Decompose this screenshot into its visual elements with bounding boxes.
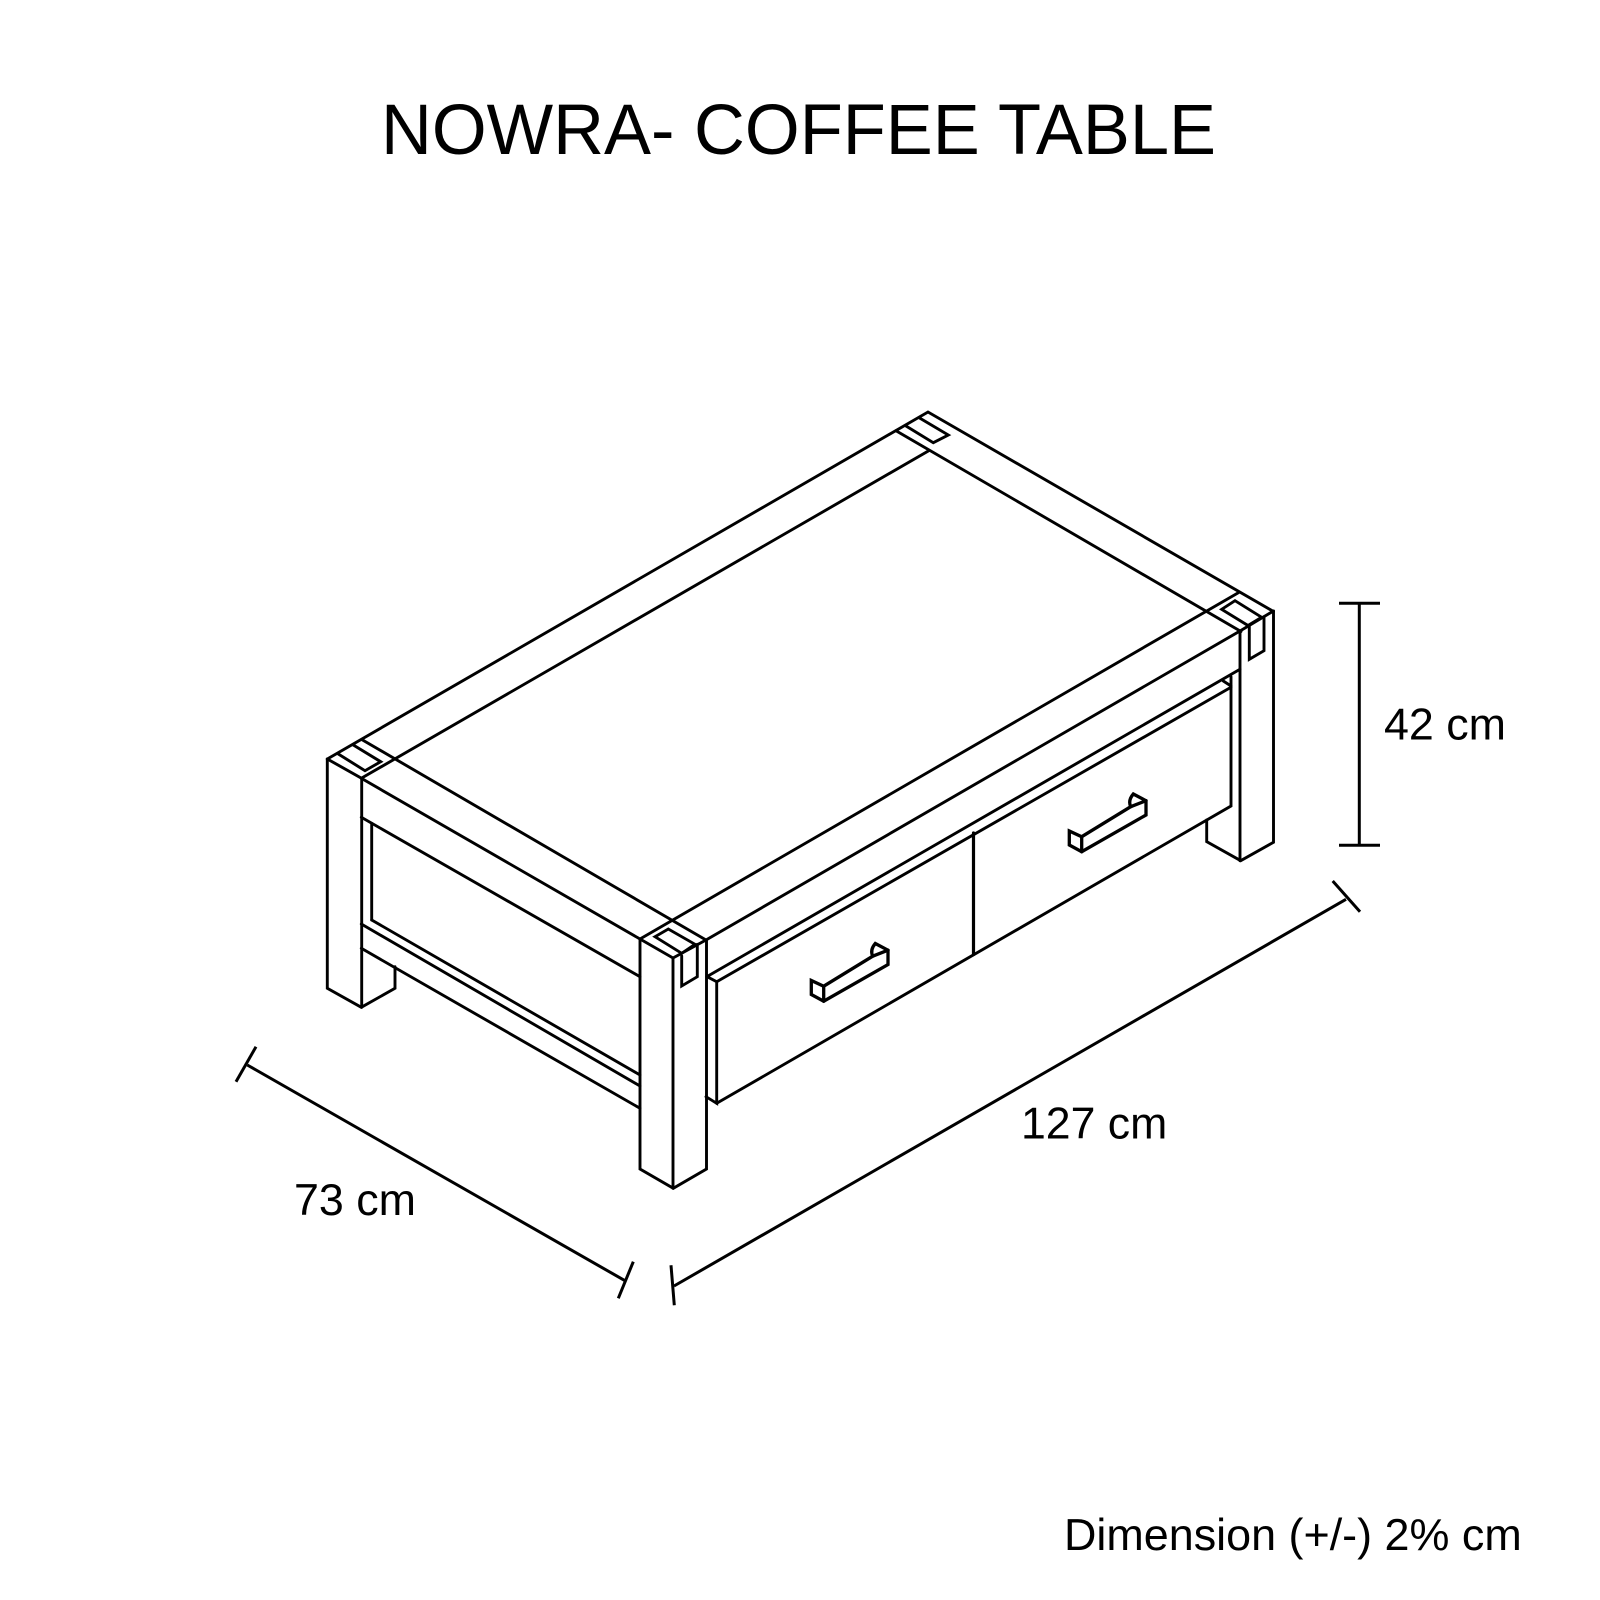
front rail [707,669,1240,977]
corner joint: front [655,929,697,986]
dimension: length 127 cm: 127 cm [1021,1100,1167,1148]
drawers [706,677,1231,1103]
drawer handle: left [811,944,888,1001]
corner joint: left [338,745,381,771]
dimension: height 42 cm: 42 cm [1384,700,1506,750]
dimension: width 73 cm [236,1047,633,1298]
dimension: width 73 cm: 73 cm [294,1175,416,1225]
right leg [1207,611,1274,861]
front corner leg [640,939,706,1188]
coffee table line drawing [327,412,1274,1188]
title: NOWRA- COFFEE TABLE [381,91,1216,170]
corner joint: back [906,418,948,443]
left leg [327,759,395,1007]
corner joint: right [1222,601,1264,659]
footnote: dimension tolerance: Dimension (+/-) 2% cm [1064,1509,1522,1560]
drawer handle: right [1069,794,1146,852]
table top surface [327,412,1274,940]
dimension: length 127 cm [671,881,1360,1305]
left end rail and panel [361,778,640,1108]
